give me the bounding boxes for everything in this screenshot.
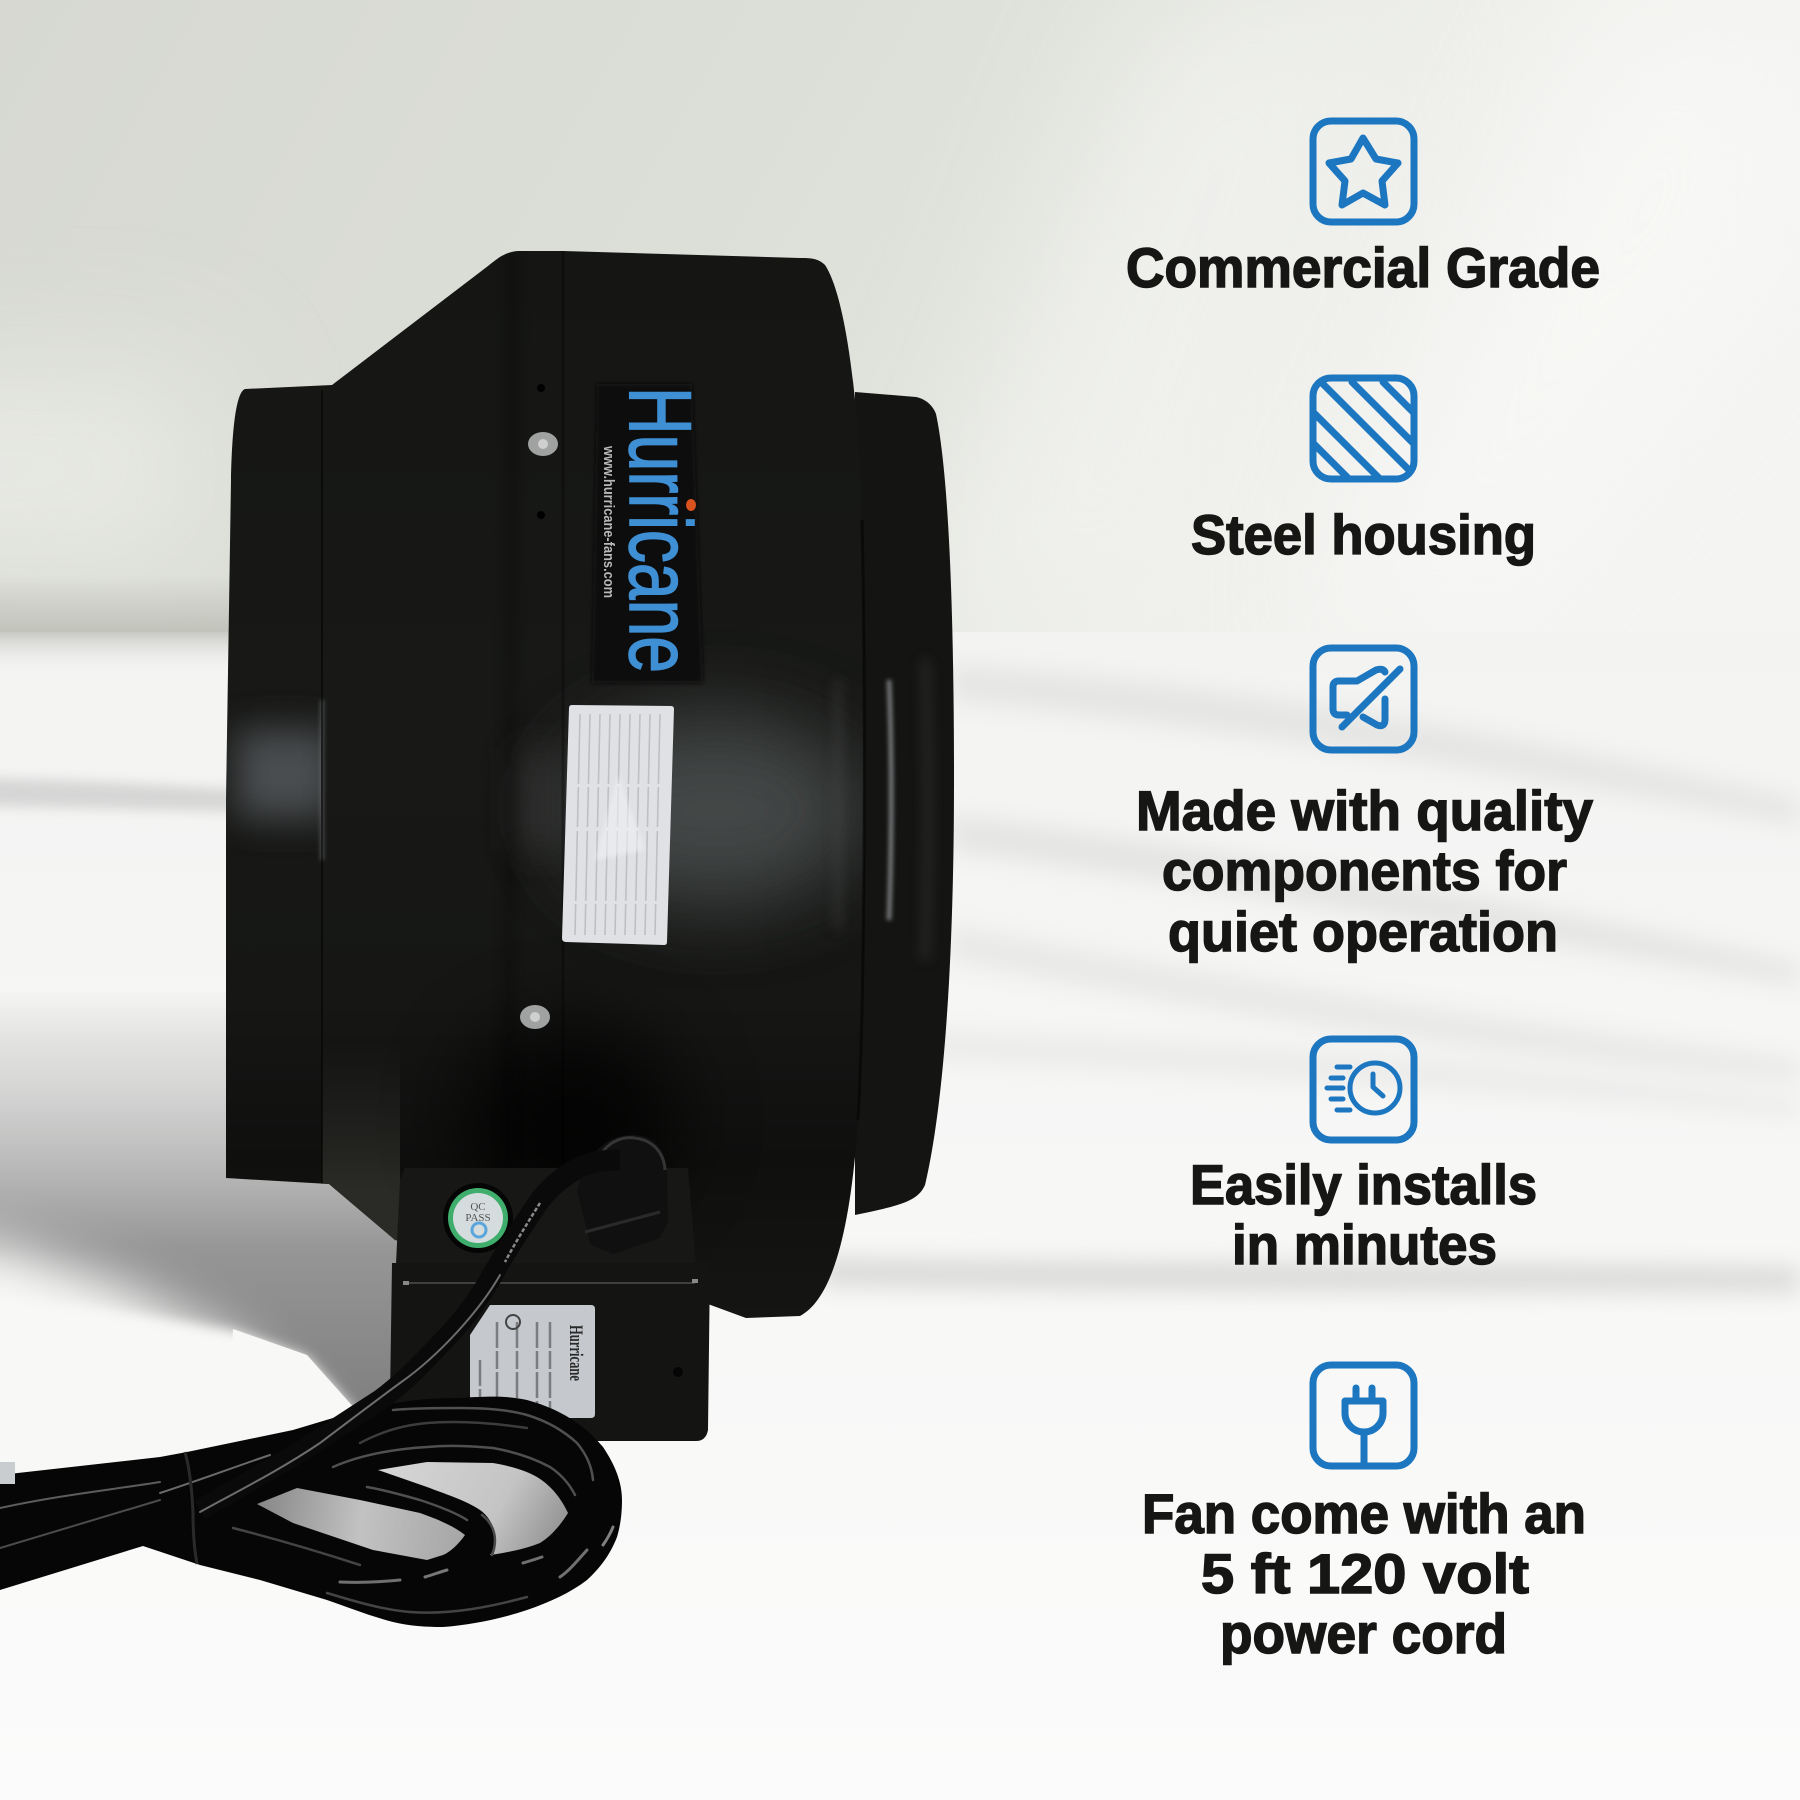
text: easy install bbox=[1190, 1153, 1537, 1276]
cord tag bbox=[0, 1462, 15, 1484]
heading: commercial grade: Commercial Grade bbox=[1126, 236, 1600, 299]
flange highlight bbox=[889, 680, 891, 920]
text: power cord: 5 ft 120 volt bbox=[1201, 1542, 1529, 1605]
feature: steel housing bbox=[1191, 378, 1536, 566]
text: power cord bbox=[1142, 1482, 1586, 1665]
logo swirl bbox=[686, 499, 696, 511]
text: power cord: power cord bbox=[1220, 1602, 1507, 1665]
box rating label: Hurricane bbox=[565, 1325, 586, 1381]
cable tie bbox=[185, 1452, 197, 1564]
cord imprint bbox=[505, 1203, 540, 1262]
cable gland bbox=[577, 1135, 668, 1254]
cord strand from gland bbox=[200, 1160, 620, 1510]
text: easy install: in minutes bbox=[1232, 1213, 1497, 1276]
opening in cord coil, left bbox=[257, 1488, 465, 1560]
mounting screws bbox=[520, 384, 558, 1029]
QC pass sticker: PASS bbox=[465, 1212, 491, 1224]
logo wordmark: Hurricane bbox=[611, 387, 710, 673]
warning label bbox=[562, 705, 674, 945]
floor shadow behind fan bbox=[0, 990, 400, 1480]
QC pass sticker bbox=[443, 1183, 513, 1253]
fan housing body bbox=[226, 251, 864, 1318]
text: quiet operation: Made with quality bbox=[1136, 779, 1593, 842]
text: quiet operation: quiet operation bbox=[1168, 900, 1558, 963]
QC pass sticker: QC bbox=[470, 1201, 486, 1213]
feature: quiet operation bbox=[1136, 648, 1593, 963]
fan right flange bbox=[855, 392, 954, 1215]
cord highlights bbox=[0, 1275, 613, 1613]
box rating label bbox=[470, 1305, 595, 1418]
icon: star bbox=[1313, 121, 1414, 222]
logo sticker bbox=[592, 384, 710, 683]
icon: muted speaker bbox=[1313, 648, 1414, 750]
coiled power cord bbox=[0, 1160, 622, 1627]
product: inline duct fan bbox=[0, 251, 954, 1627]
text: quiet operation: components for bbox=[1162, 839, 1567, 902]
text: easy install: Easily installs bbox=[1190, 1153, 1537, 1216]
feature: easy install bbox=[1190, 1039, 1537, 1276]
website url: www.hurricane-fans.com bbox=[600, 445, 617, 598]
electrical junction box bbox=[390, 1135, 710, 1441]
icon: diagonal steel stripes bbox=[1313, 378, 1414, 480]
feature: power cord bbox=[1142, 1365, 1586, 1665]
text: quiet operation bbox=[1136, 779, 1593, 963]
feature: commercial grade bbox=[1126, 121, 1600, 299]
opening in cord coil, right bbox=[378, 1462, 568, 1555]
icon: fast clock bbox=[1313, 1039, 1414, 1140]
icon: plug bbox=[1313, 1365, 1414, 1466]
background: wall and floor bbox=[0, 0, 1800, 1298]
text: power cord: Fan come with an bbox=[1142, 1482, 1586, 1545]
heading: steel housing: Steel housing bbox=[1191, 503, 1536, 566]
